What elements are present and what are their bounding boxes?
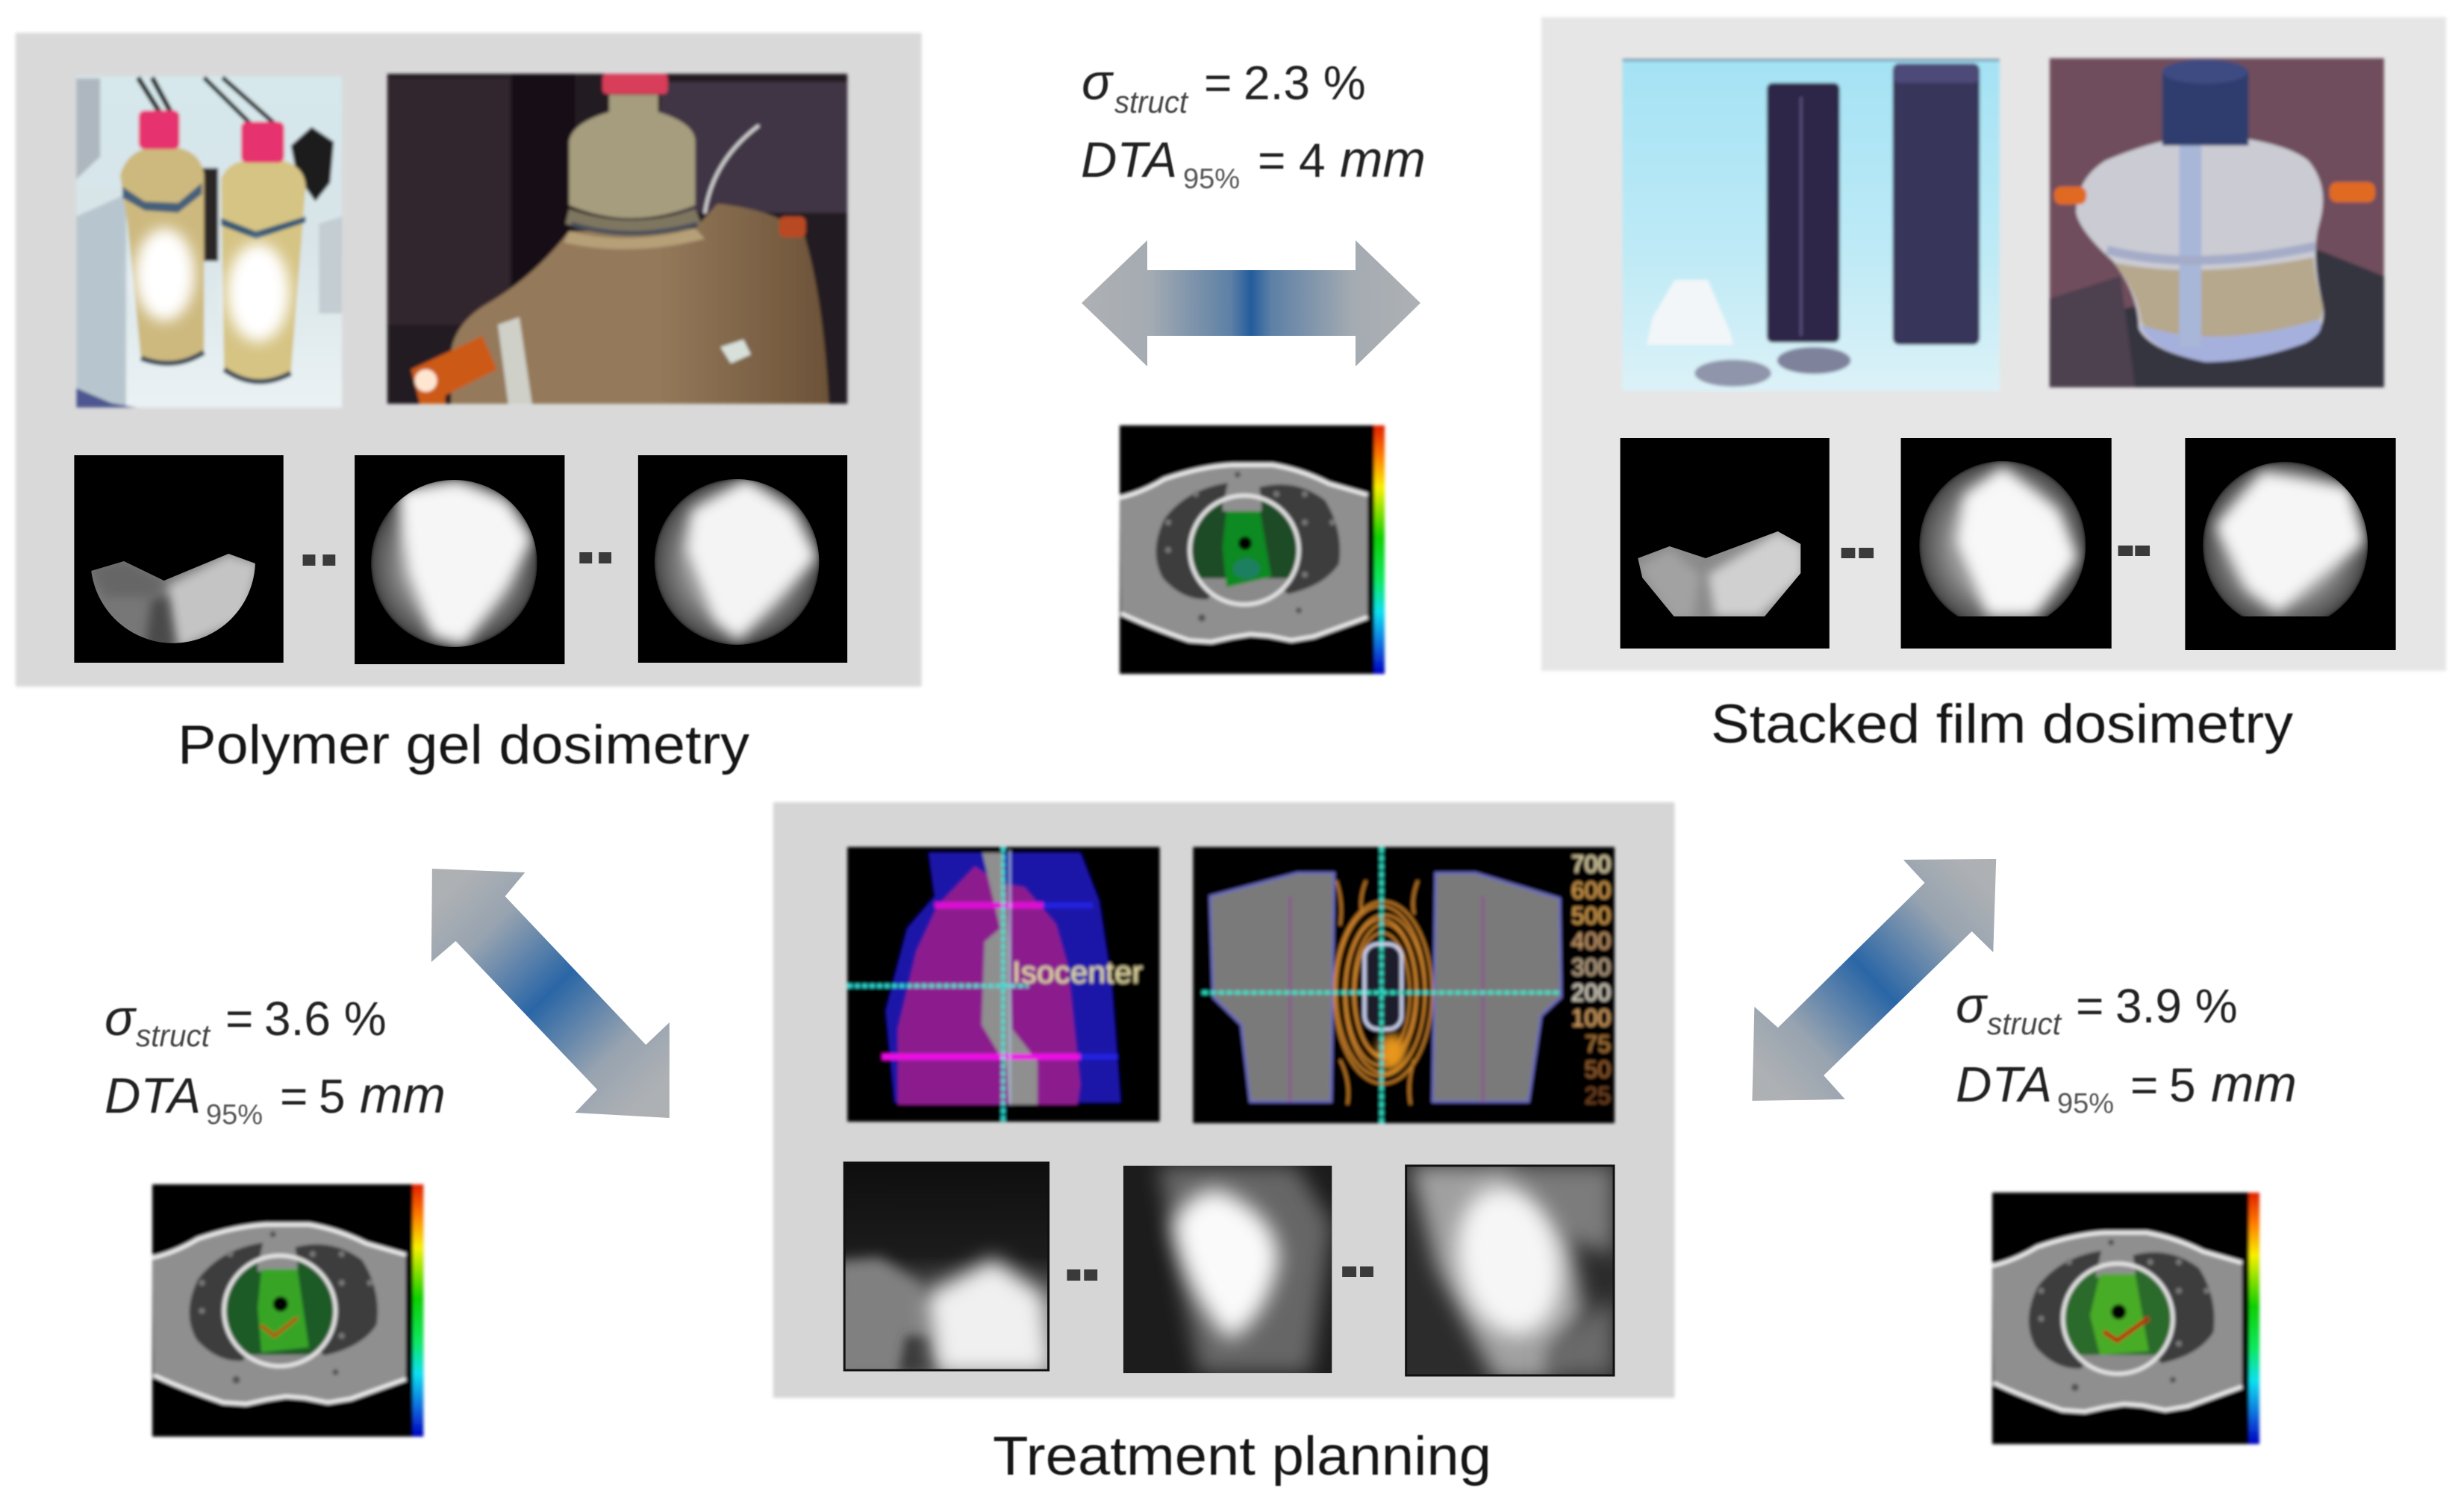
image: sagittal plan view [847, 847, 1160, 1122]
metrics: gel vs treatment [105, 990, 446, 1131]
dots separator [1067, 1269, 1097, 1281]
photo: gel-filled bottles [76, 76, 342, 407]
metrics: gel vs treatment: 3.6 % [264, 992, 387, 1046]
metrics: gel vs treatment: 5 [319, 1069, 346, 1123]
metrics: gel vs film: DTA [1081, 132, 1177, 188]
heading: stacked film dosimetry: Stacked film dosimetry [1711, 694, 2294, 754]
dots separator [579, 552, 611, 563]
photo: film phantom [2050, 58, 2384, 387]
dots separator [1342, 1266, 1373, 1277]
metrics: gel vs film: = [1204, 56, 1232, 110]
metrics: gel vs film: 95% [1183, 163, 1240, 195]
photo: film stacks [1623, 59, 2000, 391]
dose image: plan slice 1 [835, 1163, 1051, 1373]
metrics: gel vs film: 4 [1299, 134, 1326, 187]
heading: polymer gel dosimetry: Polymer gel dosimetry [178, 715, 750, 775]
image: coronal dose contours [1193, 847, 1615, 1123]
dots separator [303, 554, 335, 566]
dose scale numbers: 500 [1571, 902, 1611, 929]
CT dose map: gel vs treatment [152, 1184, 423, 1437]
dose scale numbers: 400 [1571, 928, 1611, 955]
metrics: gel vs film: σ [1082, 54, 1114, 110]
metrics: gel vs treatment: σ [105, 990, 137, 1046]
dots separator [2118, 546, 2150, 556]
CT dose map: film vs treatment [1992, 1193, 2259, 1444]
metrics: gel vs film: 2.3 % [1244, 56, 1366, 110]
dose scale numbers: 300 [1571, 954, 1611, 981]
metrics: gel vs film [1081, 54, 1426, 195]
metrics: film vs treatment: = [2130, 1058, 2158, 1112]
arrow: film to treatment [1752, 859, 1996, 1101]
panel: stacked film dosimetry [1541, 17, 2446, 671]
arrow: gel to treatment [431, 869, 670, 1118]
metrics: gel vs treatment: struct [136, 1018, 211, 1053]
metrics: film vs treatment: 3.9 % [2115, 979, 2238, 1033]
dose image: gel slice 2 [355, 455, 564, 664]
dots separator [1841, 548, 1874, 558]
heading: treatment planning: Treatment planning [993, 1426, 1491, 1487]
panel: treatment planning [773, 802, 1674, 1398]
metrics: film vs treatment: DTA [1956, 1057, 2052, 1113]
CT dose map: gel vs film [1120, 425, 1385, 674]
metrics: film vs treatment: σ [1956, 977, 1989, 1034]
metrics: gel vs treatment: = [225, 992, 253, 1046]
dose scale numbers [1571, 851, 1611, 1109]
metrics: gel vs film: = [1258, 134, 1285, 187]
dose scale numbers: 700 [1571, 851, 1611, 878]
metrics: film vs treatment: 95% [2057, 1088, 2114, 1119]
dose scale numbers: 75 [1585, 1031, 1611, 1057]
label: isocenter: Isocenter [1012, 955, 1143, 990]
dose scale numbers: 200 [1571, 979, 1611, 1006]
dose image: film slice 1 [1621, 438, 1830, 649]
metrics: film vs treatment: struct [1987, 1006, 2062, 1041]
dose image: film slice 2 [1901, 438, 2112, 649]
metrics: gel vs treatment: DTA [105, 1068, 201, 1124]
metrics: film vs treatment: = [2076, 979, 2103, 1033]
metrics: gel vs film: struct [1114, 84, 1189, 119]
metrics: gel vs treatment: 95% [206, 1099, 263, 1131]
dose image: gel slice 3 [638, 455, 847, 663]
metrics: film vs treatment: 5 [2169, 1058, 2196, 1112]
dose image: plan slice 3 [1406, 1166, 1614, 1381]
metrics: gel vs film: mm [1340, 131, 1426, 188]
dose scale numbers: 25 [1585, 1082, 1611, 1109]
metrics: film vs treatment [1956, 977, 2297, 1119]
metrics: gel vs treatment: mm [360, 1066, 446, 1124]
photo: gel phantom [387, 74, 847, 404]
dose scale numbers: 50 [1585, 1056, 1611, 1083]
arrow: gel to film [1082, 240, 1420, 366]
dose scale numbers: 100 [1571, 1005, 1611, 1031]
metrics: gel vs treatment: = [280, 1069, 308, 1123]
metrics: film vs treatment: mm [2211, 1055, 2297, 1113]
dose scale numbers: 600 [1571, 877, 1611, 904]
dose image: gel slice 1 [74, 455, 284, 663]
dose image: film slice 3 [2185, 438, 2396, 650]
panel: polymer gel dosimetry [16, 33, 922, 687]
dose image: plan slice 2 [1123, 1166, 1332, 1373]
